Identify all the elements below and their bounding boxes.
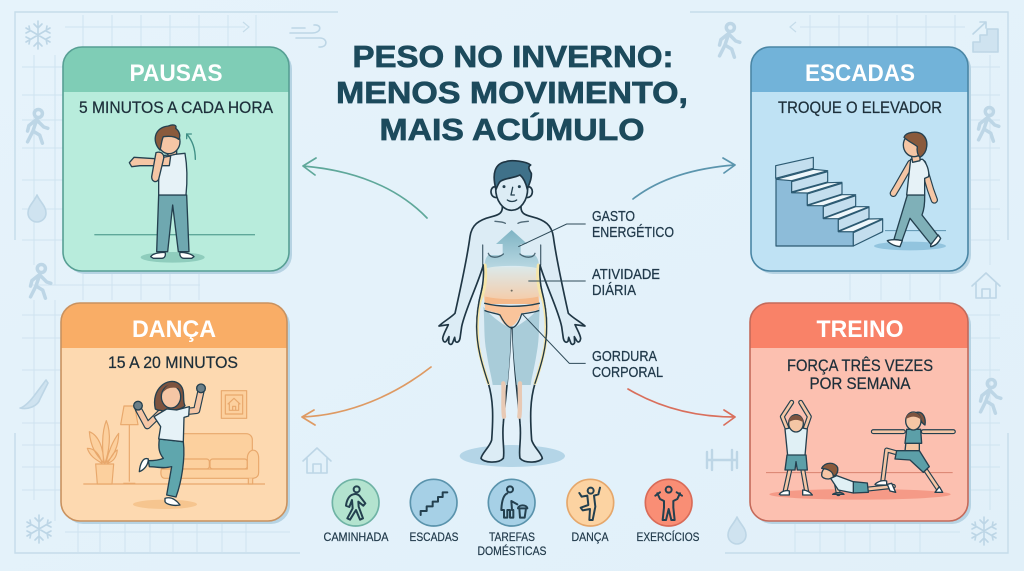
heading: pausas: PAUSAS (130, 60, 222, 87)
heading: escadas: ESCADAS (805, 60, 915, 87)
leader lines (518, 224, 586, 363)
icon: exercícios: EXERCÍCIOS (636, 529, 700, 544)
icon: caminhada: CAMINHADA (324, 530, 388, 544)
label: gordura corporal: CORPORAL (592, 365, 663, 381)
label: gasto energético: GASTO (592, 209, 635, 225)
text: 5 minutos: 5 MINUTOS A CADA HORA (79, 98, 274, 117)
icon: tarefas domésticas: DOMÉSTICAS (478, 543, 546, 558)
arrow: to treino (628, 389, 735, 425)
arrow: to escadas (633, 158, 735, 199)
text: 15 a 20 minutos: 15 A 20 MINUTOS (108, 353, 238, 372)
label: gasto energético: ENERGÉTICO (592, 224, 674, 241)
activity icons row (324, 479, 700, 558)
title: MAIS ACÚMULO (380, 111, 644, 147)
label: atividade diária: ATIVIDADE (592, 267, 660, 283)
title (336, 39, 688, 147)
body silhouette (439, 207, 585, 462)
title: PESO NO INVERNO: (352, 39, 674, 74)
arrow: to pausas (303, 158, 427, 218)
figure: man stretching (94, 125, 255, 263)
illustration: stairs and man walking (776, 132, 946, 250)
text: força três vezes: FORÇA TRÊS VEZES (787, 356, 933, 375)
panel: pausas (63, 47, 292, 274)
label: gasto energético (592, 209, 674, 241)
icon: dança (567, 479, 614, 544)
icon: tarefas domésticas (478, 479, 546, 558)
body figure (439, 161, 586, 467)
label: atividade diária (592, 267, 660, 299)
panel: treino (750, 303, 971, 524)
label: atividade diária: DIÁRIA (592, 282, 636, 299)
arrow: to dança (302, 367, 431, 425)
icon: exercícios (636, 479, 700, 544)
illustration: three people exercising (766, 402, 953, 500)
text: troque o elevador: TROQUE O ELEVADOR (778, 98, 942, 117)
heading: dança: DANÇA (132, 316, 216, 343)
icon: escadas: ESCADAS (410, 530, 458, 544)
label: gordura corporal: GORDURA (592, 349, 657, 365)
icon: caminhada (324, 479, 388, 544)
label: gordura corporal (592, 349, 663, 381)
panel: escadas (751, 47, 971, 274)
panel: dança (61, 303, 290, 524)
icon: escadas (410, 479, 458, 544)
head (491, 161, 532, 210)
icon: tarefas domésticas: TAREFAS (489, 530, 535, 544)
icon: dança: DANÇA (572, 530, 608, 544)
text: por semana: POR SEMANA (810, 374, 911, 393)
fat and energy zones (477, 221, 547, 417)
illustration: woman dancing in living room (83, 381, 265, 509)
heading: treino: TREINO (816, 316, 904, 343)
title: MENOS MOVIMENTO, (336, 75, 688, 110)
